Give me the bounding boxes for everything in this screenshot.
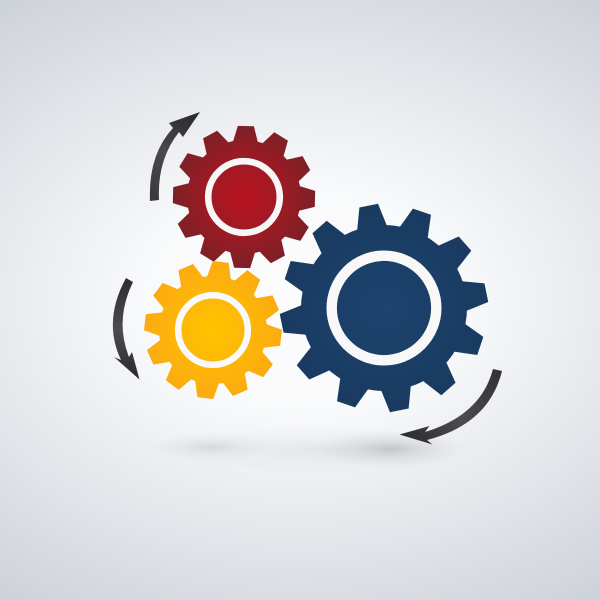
arrow: around red gear [150, 112, 200, 201]
arrow: around blue gear [400, 369, 502, 444]
shadow under gears [150, 426, 485, 474]
blue gear [279, 203, 489, 413]
yellow gear [144, 261, 282, 399]
arrow: around yellow gear [113, 278, 140, 380]
red gear [173, 126, 315, 268]
